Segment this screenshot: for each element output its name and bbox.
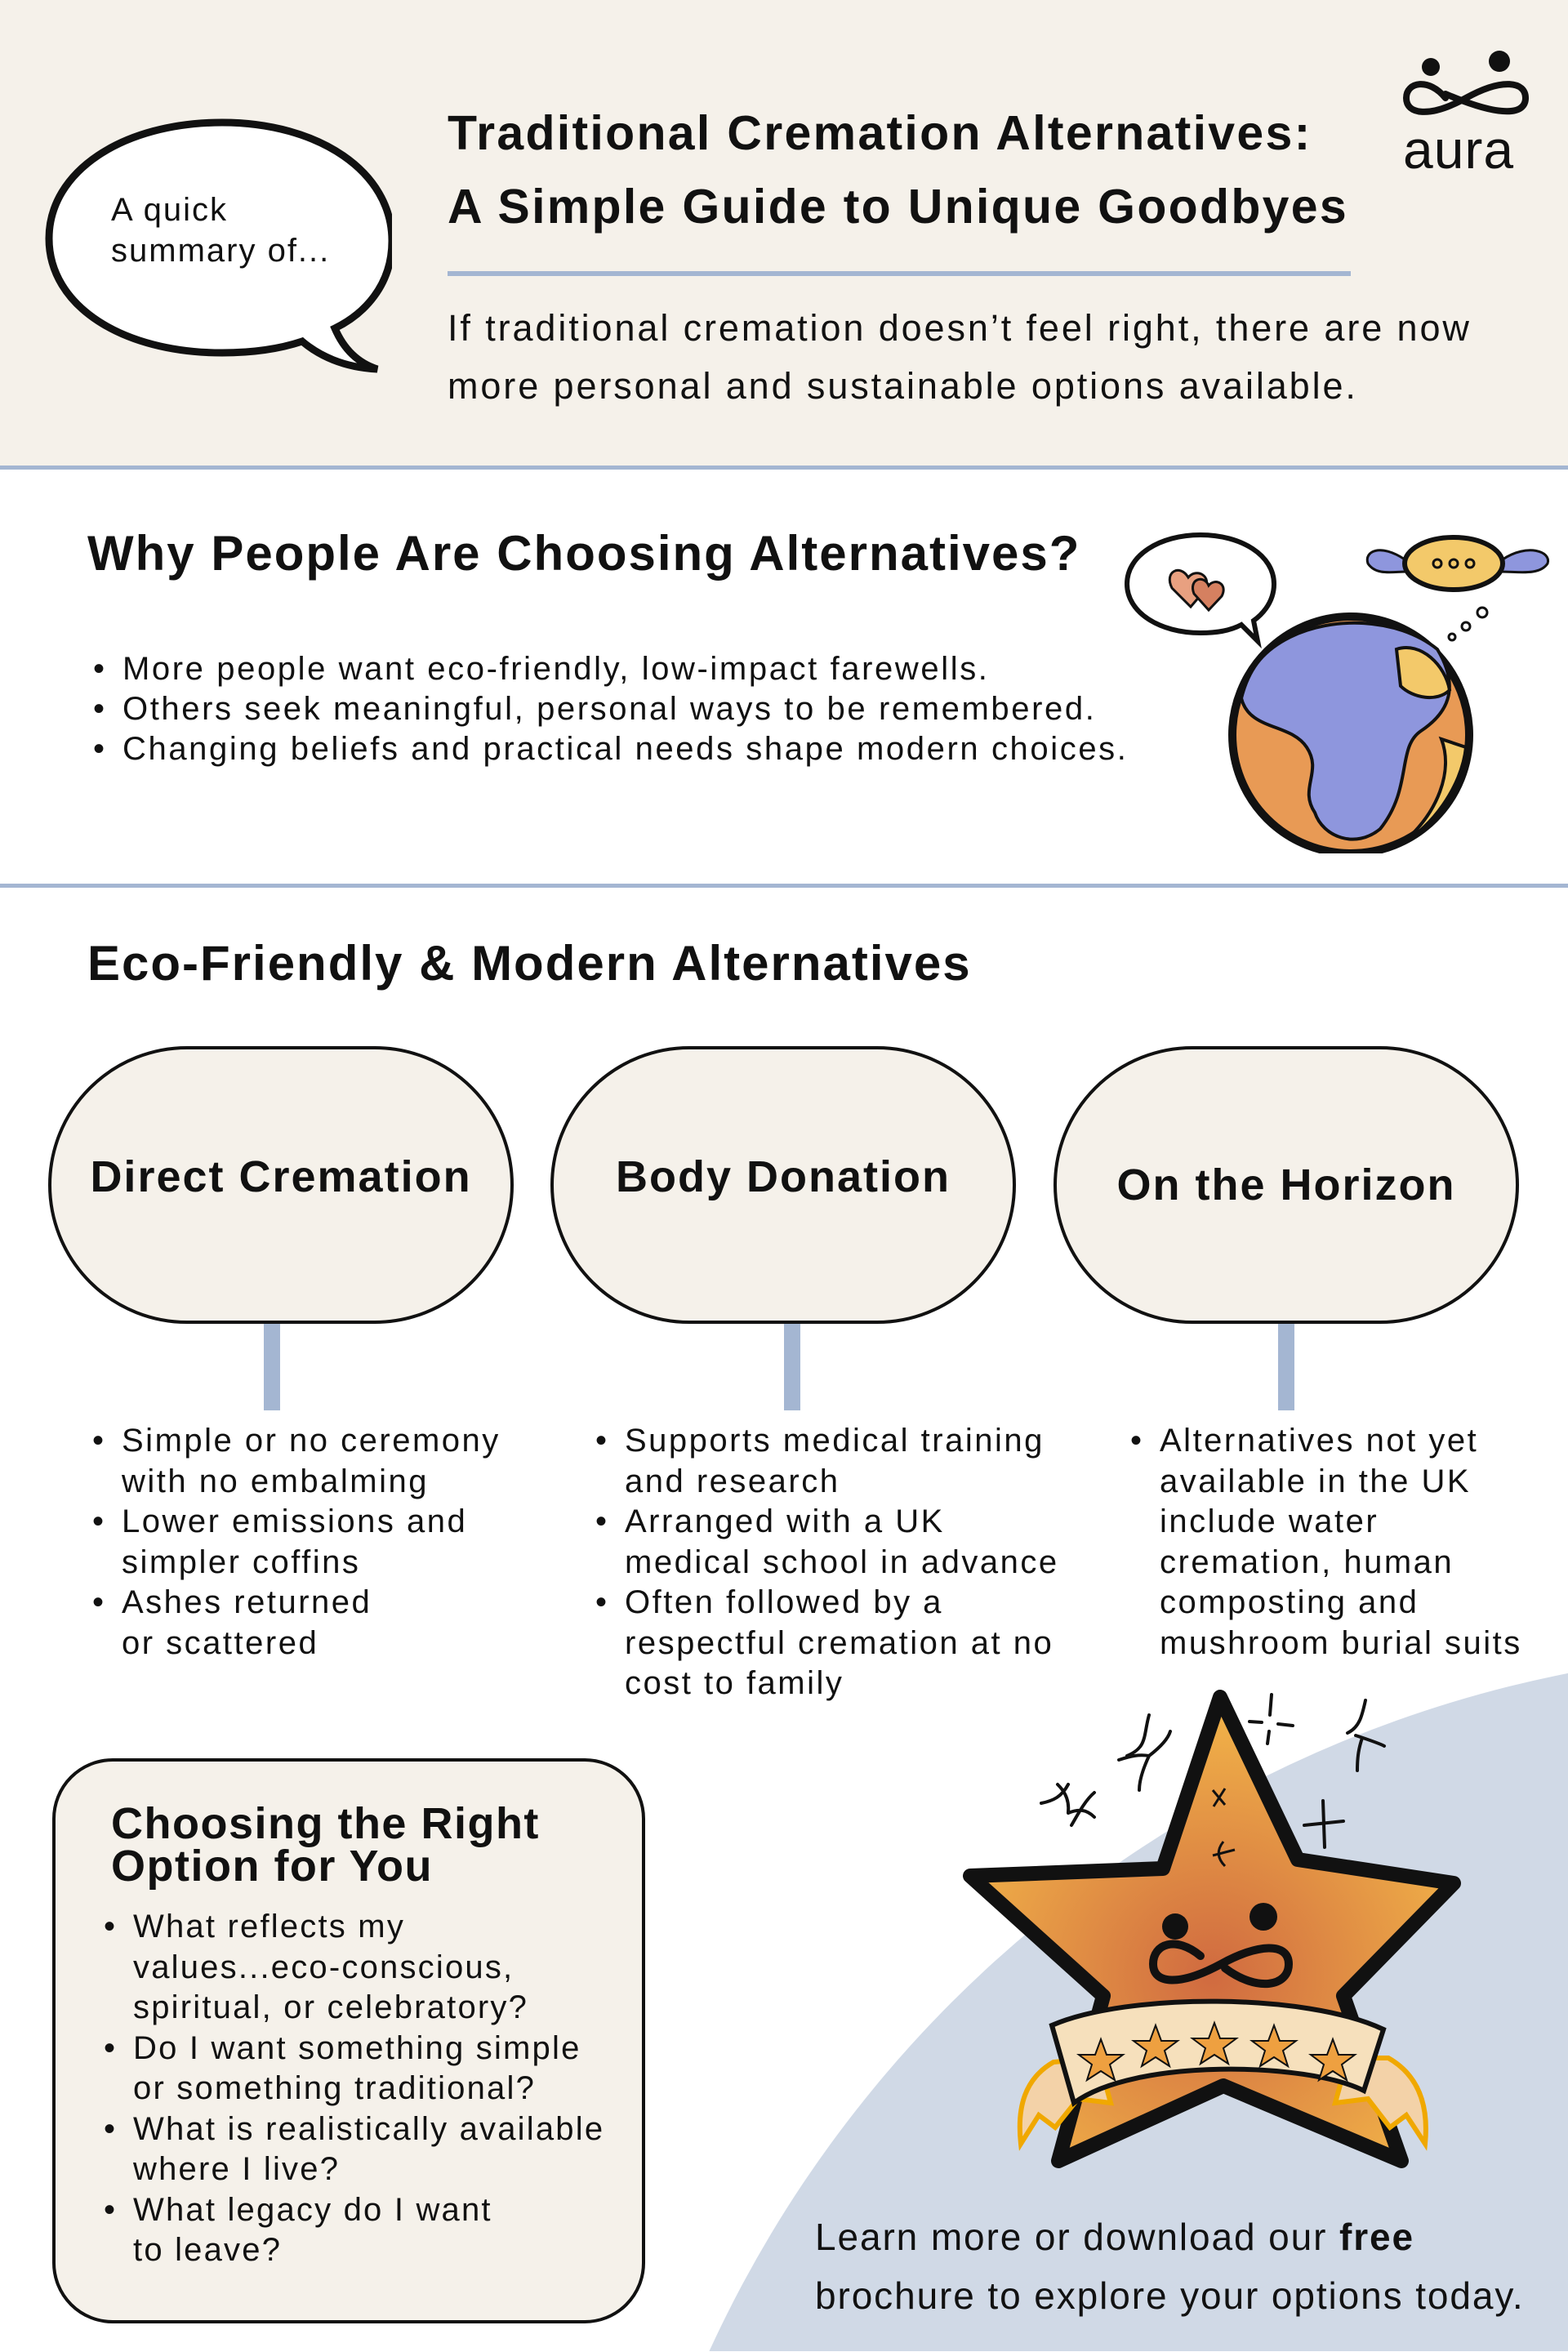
card: body donation: Body Donation: [616, 1152, 951, 1201]
bullets why: Changing beliefs and practical needs shape modern choices.: [122, 731, 1128, 767]
call to action text: brochure to explore your options today.: [815, 2274, 1524, 2317]
choosing heading: [111, 1799, 540, 1891]
logo: [1403, 51, 1529, 180]
title rule: [448, 271, 1351, 276]
heading eco: Eco-Friendly & Modern Alternatives: [87, 936, 972, 991]
list: horizon: [1132, 1423, 1522, 1661]
list: direct cremation: or scattered: [122, 1625, 318, 1661]
subtitle: [448, 307, 1472, 407]
list: body donation: Supports medical training: [625, 1423, 1045, 1459]
header panel: [0, 0, 1568, 470]
card: direct cremation: [48, 1046, 514, 1324]
bullets why: More people want eco-friendly, low-impact farewells.: [122, 651, 990, 687]
choosing bullets: spiritual, or celebratory?: [133, 1989, 528, 2025]
section: why people: [0, 474, 1568, 888]
bullets why: Others seek meaningful, personal ways to be remembered.: [122, 691, 1096, 727]
subtitle: If traditional cremation doesn’t feel right, there are now: [448, 307, 1472, 349]
card: direct cremation: Direct Cremation: [90, 1152, 472, 1201]
connector 3: [1278, 1324, 1294, 1410]
speech bubble: [46, 119, 392, 372]
title: Traditional Cremation Alternatives:: [448, 106, 1312, 160]
choosing bullets: Do I want something simple: [133, 2030, 581, 2066]
illustration: globe with bubbles: [1125, 532, 1550, 853]
connector 2: [784, 1324, 800, 1410]
list: body donation: Arranged with a UK: [625, 1503, 945, 1539]
logo: aura: [1403, 119, 1514, 180]
list: horizon: mushroom burial suits: [1160, 1625, 1522, 1661]
choosing bullets: values...eco-conscious,: [133, 1949, 514, 1984]
card: on the horizon: On the Horizon: [1117, 1160, 1455, 1209]
title: A Simple Guide to Unique Goodbyes: [448, 180, 1348, 234]
call to action text: Learn more or download our free: [815, 2216, 1414, 2258]
choosing bullets: where I live?: [133, 2151, 340, 2187]
bubble text: summary of...: [111, 233, 330, 269]
choosing bullets: What reflects my: [133, 1909, 405, 1944]
list: direct cremation: Simple or no ceremony: [122, 1423, 501, 1459]
list: body donation: medical school in advance: [625, 1544, 1059, 1579]
list: direct cremation: Lower emissions and: [122, 1503, 467, 1539]
choosing bullets: [105, 1909, 604, 2268]
title: [448, 106, 1348, 234]
choosing bullets: or something traditional?: [133, 2070, 536, 2106]
choosing heading: Option for You: [111, 1842, 433, 1891]
bubble text: A quick: [111, 192, 228, 228]
choosing bullets: What legacy do I want: [133, 2192, 492, 2228]
list: horizon: cremation, human: [1160, 1544, 1454, 1579]
list: body donation: and research: [625, 1463, 840, 1499]
choosing bullets: What is realistically available: [133, 2110, 604, 2146]
list: horizon: available in the UK: [1160, 1463, 1471, 1499]
card: body donation: [550, 1046, 1016, 1324]
heading why: Why People Are Choosing Alternatives?: [87, 526, 1080, 581]
subtitle: more personal and sustainable options available.: [448, 365, 1358, 407]
panel: choosing the right option: [52, 1758, 645, 2323]
call to action text: [815, 2216, 1524, 2317]
list: direct cremation: Ashes returned: [122, 1584, 372, 1620]
bottom blue circle background: [709, 1673, 1568, 2351]
list: horizon: include water: [1160, 1503, 1379, 1539]
list: horizon: composting and: [1160, 1584, 1419, 1620]
list: body donation: [596, 1423, 1059, 1701]
list: horizon: Alternatives not yet: [1160, 1423, 1478, 1459]
connector 1: [264, 1324, 280, 1410]
list: body donation: respectful cremation at no: [625, 1625, 1054, 1661]
list: direct cremation: simpler coffins: [122, 1544, 360, 1579]
card: on the horizon: [1054, 1046, 1519, 1324]
choosing bullets: to leave?: [133, 2232, 282, 2268]
choosing heading: Choosing the Right: [111, 1799, 540, 1848]
list: direct cremation: with no embalming: [122, 1463, 429, 1499]
list: body donation: cost to family: [625, 1665, 844, 1701]
list: body donation: Often followed by a: [625, 1584, 943, 1620]
list: direct cremation: [93, 1423, 501, 1661]
bubble text: [111, 192, 330, 269]
bullets why: [95, 651, 1128, 767]
illustration: star with banner: [963, 1690, 1461, 2168]
